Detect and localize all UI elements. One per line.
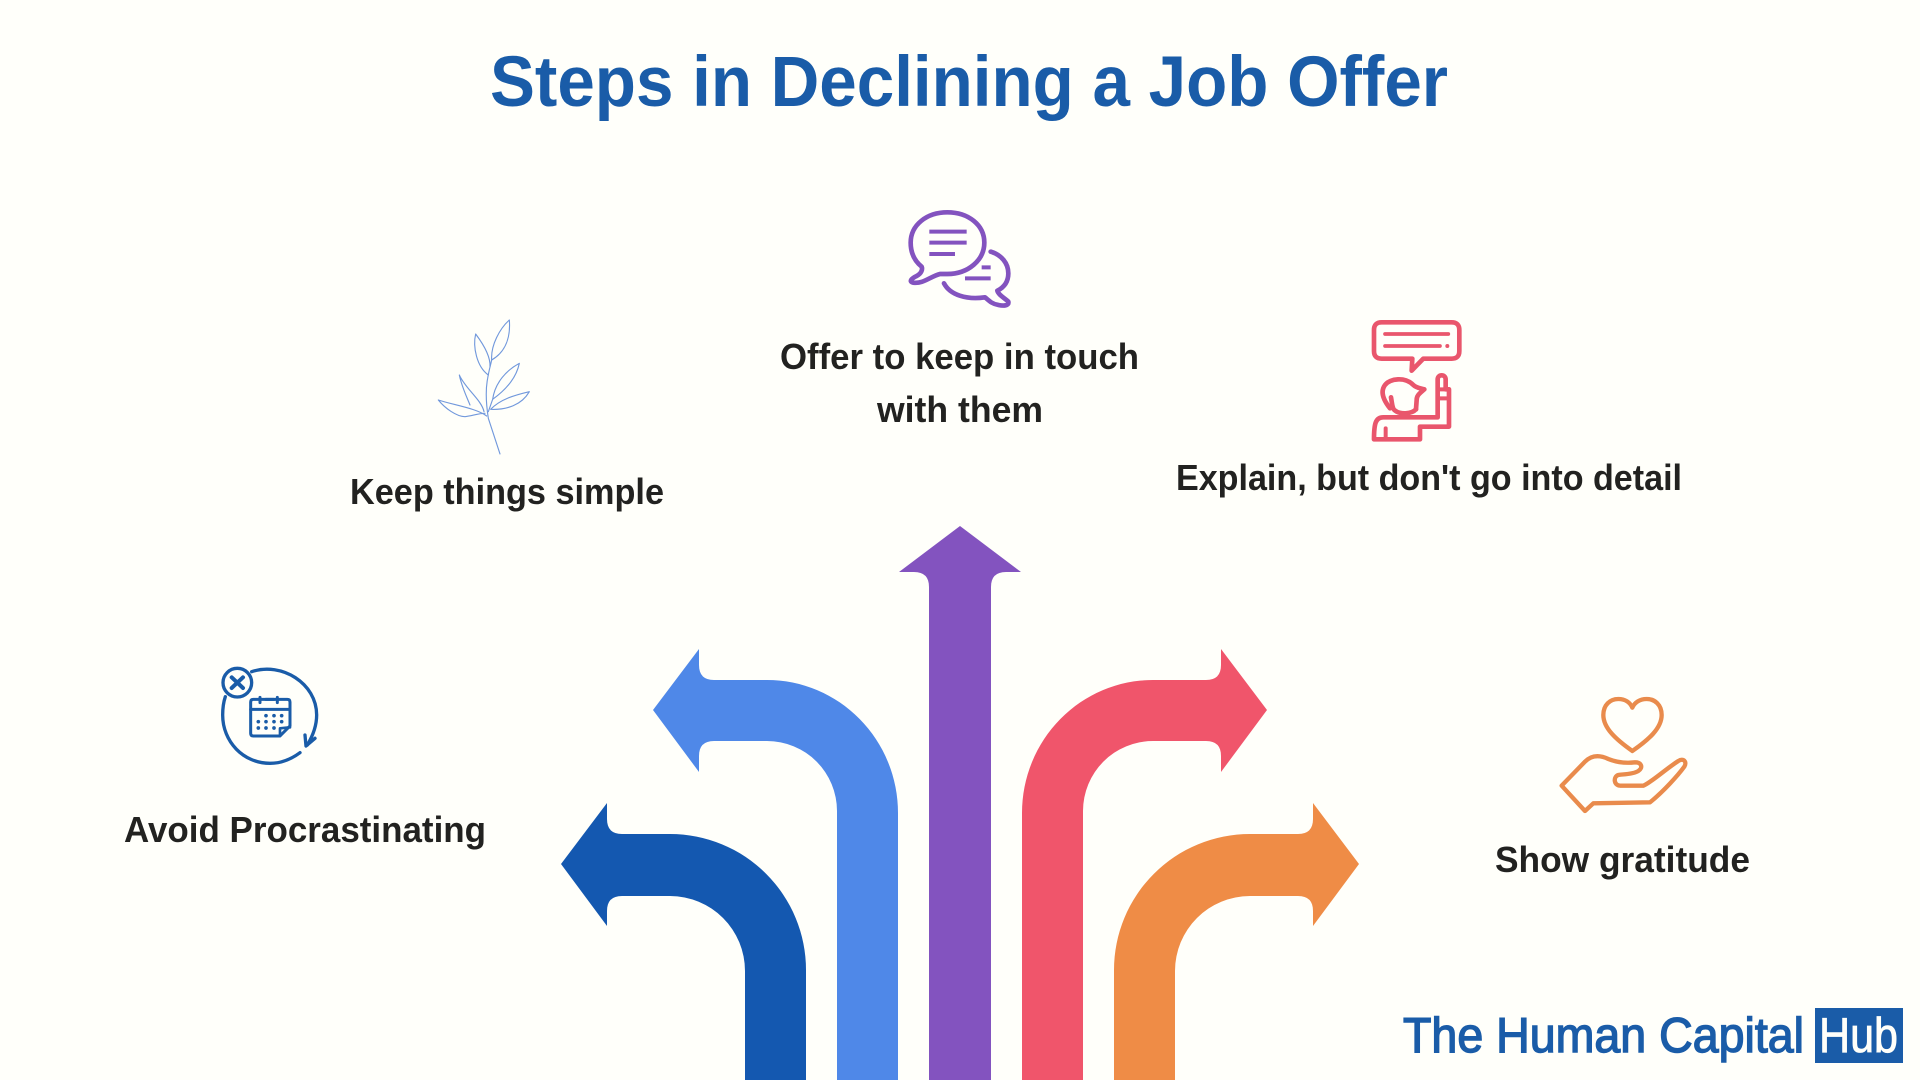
arrow: purple up (899, 526, 1021, 1080)
icon: chat bubbles (911, 212, 1008, 306)
title: Steps in Declining a Job Offer (490, 43, 1448, 122)
label: offer to keep in touch: Offer to keep in touch (780, 336, 1139, 377)
arrow: dark blue left (561, 803, 806, 1080)
icon: person with speech bubble (1374, 322, 1459, 439)
logo: The Human Capital Hub: Hub (1819, 1009, 1898, 1063)
logo: The Human Capital Hub: The Human Capital (1403, 1009, 1804, 1063)
arrow: red right (1022, 649, 1267, 1080)
arrow: orange right (1114, 803, 1359, 1080)
label: show gratitude: Show gratitude (1495, 839, 1750, 880)
icon: hand holding heart (1562, 699, 1685, 811)
label: keep things simple: Keep things simple (350, 471, 664, 512)
arrow: light blue left (653, 649, 898, 1080)
icon: leaf sprig (438, 320, 529, 454)
label: explain, but don't go into detail: Explain, but don't go into detail (1176, 457, 1682, 498)
label: avoid procrastinating: Avoid Procrastinating (124, 809, 486, 850)
label: offer to keep in touch: with them (876, 389, 1043, 430)
icon: calendar with cycle arrow (223, 668, 317, 763)
label: offer to keep in touch (780, 336, 1139, 430)
